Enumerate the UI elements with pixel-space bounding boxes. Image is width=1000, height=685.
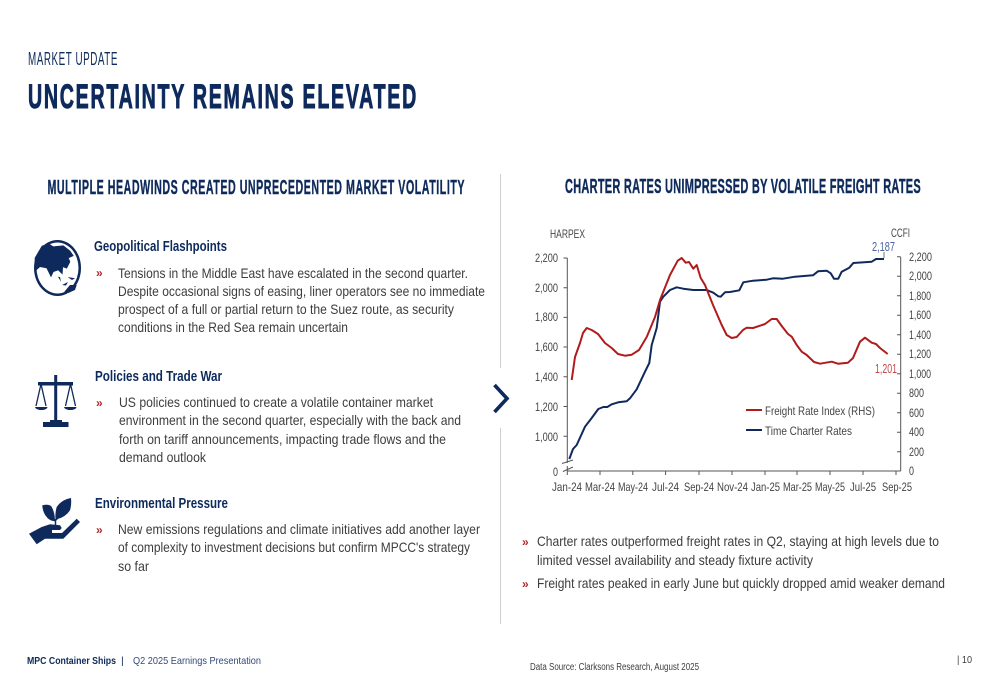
- legend: Time Charter Rates: [765, 424, 852, 438]
- right axis labels: 1,600: [909, 308, 931, 322]
- left axis labels: 2,200: [535, 251, 558, 265]
- footer: |: [121, 655, 124, 667]
- x axis labels: May-24: [618, 480, 648, 494]
- footer: [27, 654, 972, 673]
- right axis labels: 800: [909, 386, 924, 400]
- text block: geopolitical: prospect of a full or partial return to the Suez route, as security: [118, 301, 454, 317]
- right axis labels: 1,800: [909, 289, 931, 303]
- x axis labels: Jul-25: [850, 480, 876, 494]
- left panel heading: MULTIPLE HEADWINDS CREATED UNPRECEDENTED MARKET VOLATILITY: [48, 177, 465, 199]
- x axis labels: Sep-25: [882, 480, 912, 494]
- text block: chart takeaways: limited vessel availability and steady fixture activity: [537, 552, 813, 568]
- text block: policies: environment in the second quarter, especially with the back and: [119, 412, 461, 428]
- text block: environmental: of complexity to investment decisions but confirm MPCC's strategy: [118, 539, 470, 555]
- left axis labels: 2,000: [535, 281, 558, 295]
- text block: geopolitical: Despite occasional signs of easing, liner operators see no immediate: [118, 283, 485, 299]
- legend: Freight Rate Index (RHS): [765, 404, 875, 418]
- text block: chart takeaways: Charter rates outperformed freight rates in Q2, staying at high levels due to: [537, 533, 939, 549]
- right axis labels: 1,200: [909, 347, 931, 361]
- x axis labels: Nov-24: [717, 480, 748, 494]
- heading: geopolitical flashpoints: Geopolitical Flashpoints: [94, 239, 227, 255]
- x axis labels: Mar-25: [783, 480, 812, 494]
- left axis labels: 0: [553, 465, 558, 479]
- text block: environmental: so far: [118, 558, 149, 574]
- text block: chart takeaways: [522, 533, 945, 591]
- icon: hand with plant: [29, 498, 80, 544]
- text block: policies: [119, 394, 461, 465]
- x axis labels: Jan-24: [552, 480, 582, 494]
- legend: [746, 404, 875, 438]
- series: time charter rates: [569, 259, 884, 459]
- left axis labels: 1,200: [535, 400, 558, 414]
- left axis labels: 1,000: [535, 430, 558, 444]
- right axis labels: 1,400: [909, 328, 931, 342]
- text block: geopolitical: Tensions in the Middle East have escalated in the second quarter.: [118, 265, 468, 281]
- line chart: charter rates vs freight index: [535, 226, 932, 494]
- text block: geopolitical: conditions in the Red Sea remain uncertain: [118, 319, 348, 335]
- text block: policies: US policies continued to create a volatile container market: [119, 394, 433, 410]
- title: UNCERTAINTY REMAINS ELEVATED: [28, 78, 418, 116]
- bullet marker: »: [96, 396, 103, 410]
- right axis labels: CCFI: [891, 226, 910, 240]
- left axis labels: 1,400: [535, 370, 558, 384]
- left axis labels: 1,600: [535, 340, 558, 354]
- icon: globe: [34, 240, 81, 296]
- right axis labels: 400: [909, 425, 924, 439]
- text block: chart takeaways: »: [522, 535, 529, 549]
- bullet marker: »: [96, 523, 103, 537]
- right axis labels: 2,200: [909, 250, 932, 264]
- x axis labels: Sep-24: [684, 480, 714, 494]
- text block: policies: forth on tariff announcements, impacting trade flows and the: [119, 431, 446, 447]
- left axis labels: [535, 227, 585, 479]
- x axis labels: Mar-24: [585, 480, 615, 494]
- data label: 2,187: [872, 239, 895, 258]
- x axis labels: [552, 480, 912, 494]
- right axis labels: 200: [909, 445, 924, 459]
- text block: policies: demand outlook: [119, 449, 207, 465]
- x axis labels: Jan-25: [751, 480, 780, 494]
- left axis labels: 1,800: [535, 310, 558, 324]
- bullet marker: »: [96, 266, 103, 280]
- text block: environmental: New emissions regulations and climate initiatives add another layer: [118, 521, 480, 537]
- series: freight rate index: [572, 258, 888, 380]
- footer: | 10: [957, 654, 972, 666]
- right axis labels: [891, 226, 932, 478]
- text block: environmental: [118, 521, 480, 574]
- icon: scales: [35, 375, 76, 427]
- arrow: chevron between panels: [494, 385, 507, 412]
- panel: policies and trade war: [35, 369, 461, 465]
- x axis labels: Jul-24: [652, 480, 679, 494]
- x axis labels: May-25: [815, 480, 845, 494]
- text block: chart takeaways: »: [522, 577, 529, 591]
- right axis labels: 2,000: [909, 269, 932, 283]
- heading: policies and trade war: Policies and Trade War: [95, 369, 222, 385]
- footer: Q2 2025 Earnings Presentation: [133, 655, 261, 667]
- panel: environmental pressure: [29, 496, 480, 574]
- right axis labels: 0: [909, 464, 914, 478]
- footer: Data Source: Clarksons Research, August 2025: [530, 662, 699, 673]
- section label: MARKET UPDATE: [28, 49, 118, 69]
- panel: geopolitical flashpoints: [34, 239, 485, 335]
- heading: environmental pressure: Environmental Pressure: [95, 496, 228, 512]
- right axis labels: 1,000: [909, 367, 931, 381]
- right axis labels: 600: [909, 406, 924, 420]
- data label: 2,187: 2,187: [872, 239, 895, 254]
- text block: chart takeaways: Freight rates peaked in early June but quickly dropped amid weaker demand: [537, 575, 945, 591]
- text block: geopolitical: [118, 265, 485, 335]
- data label: 1,201: 1,201: [875, 361, 897, 376]
- footer: MPC Container Ships: [27, 655, 116, 667]
- left axis labels: HARPEX: [550, 227, 585, 241]
